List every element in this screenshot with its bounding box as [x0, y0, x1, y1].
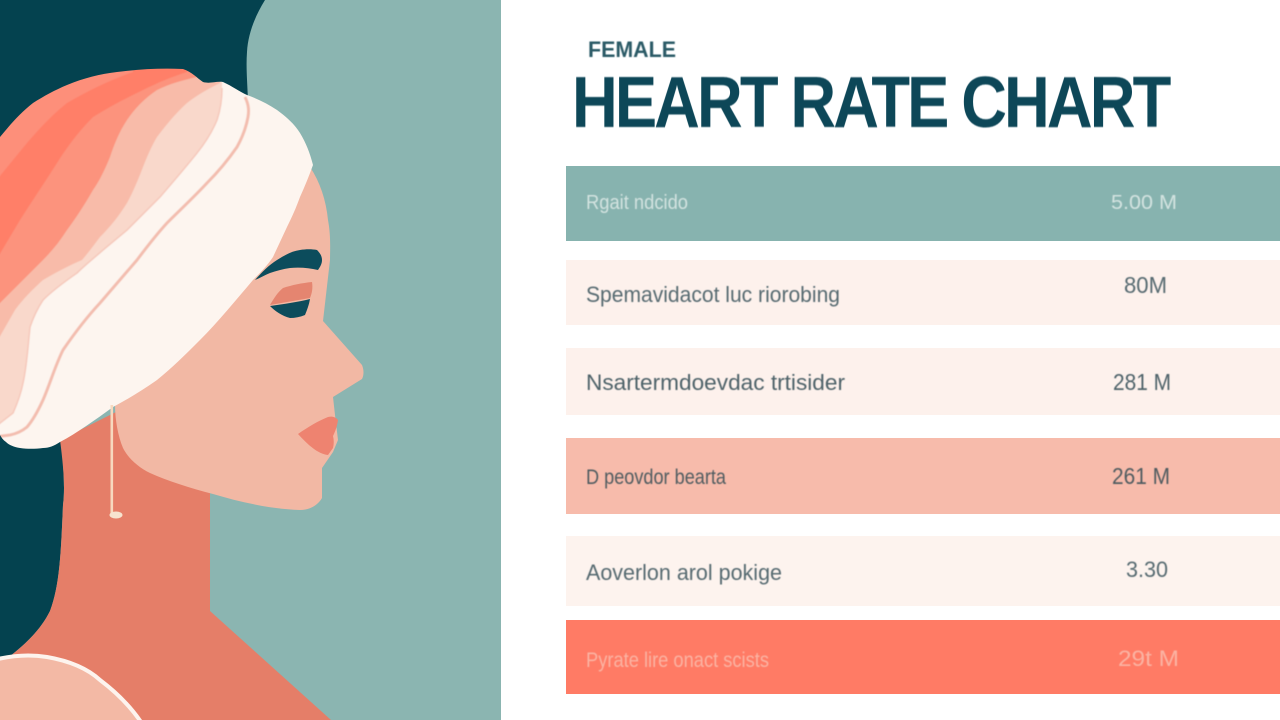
- panel: portrait illustration: [0, 0, 501, 720]
- row 4: [566, 536, 1280, 606]
- towel fold: mid coral: [0, 60, 197, 308]
- towel fold: light coral: [0, 70, 133, 176]
- row 3: 261 M: [1112, 463, 1170, 489]
- row 4: 3.30: [1126, 557, 1168, 582]
- row: header: [566, 166, 1280, 241]
- row 1: [566, 260, 1280, 325]
- lips: [298, 417, 338, 455]
- turban: [0, 60, 330, 460]
- row 3: [566, 438, 1280, 514]
- towel stripe inner: [0, 88, 222, 427]
- title: HEART RATE CHART: [572, 63, 1171, 143]
- row 1: Spemavidacot luc riorobing: [586, 282, 840, 307]
- row 2: Nsartermdoevdac trtisider: [586, 370, 845, 395]
- row 5: Pyrate lire onact scists: [586, 649, 769, 672]
- face: [115, 165, 364, 510]
- row 3: D peovdor bearta: [586, 466, 726, 489]
- row 5: [566, 620, 1280, 694]
- towel stripe outer: [0, 97, 249, 437]
- towel fold: pale pink: [0, 60, 222, 427]
- row 1: 80M: [1124, 272, 1167, 298]
- eyebrow: [255, 249, 322, 280]
- earring: [110, 405, 122, 518]
- eyelid: [270, 282, 312, 305]
- towel fold: salmon: [0, 60, 220, 345]
- dark hair behind neck: [0, 425, 64, 664]
- closed eye: [270, 299, 310, 318]
- dress shoulder: [0, 656, 141, 720]
- row 2: [566, 348, 1280, 415]
- row 4: Aoverlon arol pokige: [586, 560, 782, 585]
- row 2: 281 M: [1113, 369, 1171, 395]
- neck and shoulder: [0, 410, 331, 720]
- row: header: Rgait ndcido: [586, 192, 688, 214]
- row: header: 5.00 M: [1111, 192, 1177, 214]
- subheading: FEMALE: [588, 37, 676, 62]
- row 5: 29t M: [1118, 646, 1179, 671]
- dark hair top: [0, 0, 265, 200]
- towel fold: deep coral: [0, 60, 187, 262]
- teal backdrop: [0, 0, 501, 720]
- table: [566, 166, 1280, 694]
